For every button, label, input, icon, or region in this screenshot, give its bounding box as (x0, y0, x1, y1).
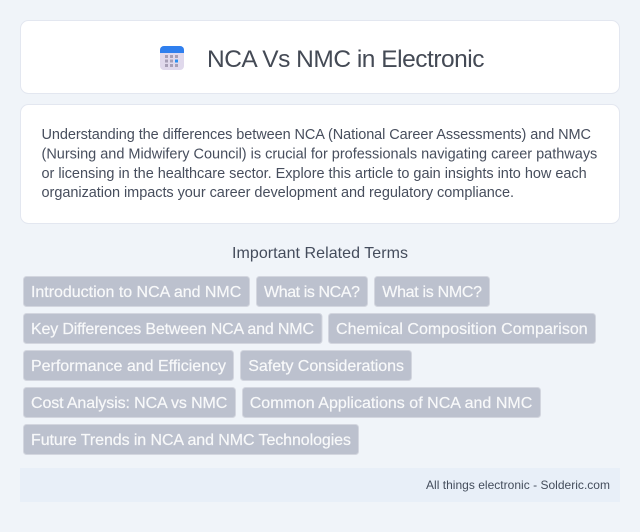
footer credit: All things electronic - Solderic.com (426, 478, 610, 492)
title: NCA Vs NMC in Electronic (207, 46, 484, 73)
description text: organization impacts your career development and regulatory compliance. (42, 185, 514, 201)
tag: Safety Considerations (248, 358, 404, 375)
tag: Future Trends in NCA and NMC Technologies (31, 432, 351, 449)
tag (24, 424, 358, 454)
heading: related terms: Important Related Terms (232, 245, 408, 262)
tag: What is NCA? (264, 284, 360, 301)
panel: description (20, 104, 620, 224)
description text: Understanding the differences between NCA (National Career Assessments) and NMC (42, 127, 591, 143)
tag (24, 350, 234, 380)
tag: Introduction to NCA and NMC (31, 284, 241, 301)
description text: or licensing in the healthcare sector. Explore this article to gain insights into how each (42, 166, 587, 182)
tag (374, 276, 490, 306)
tag (256, 276, 368, 306)
header card (20, 20, 620, 94)
tag: Common Applications of NCA and NMC (250, 395, 532, 412)
tag: What is NMC? (382, 284, 482, 301)
tag: Key Differences Between NCA and NMC (31, 321, 314, 338)
tag: Chemical Composition Comparison (336, 321, 588, 338)
description text: (Nursing and Midwifery Council) is crucial for professionals navigating career pathways (42, 146, 597, 162)
tag (24, 276, 250, 306)
tag (24, 314, 322, 344)
description text (42, 127, 597, 201)
icon: calendar (160, 46, 184, 70)
tag (242, 388, 540, 418)
tag: Cost Analysis: NCA vs NMC (31, 395, 227, 412)
tag (328, 314, 596, 344)
tag (24, 388, 236, 418)
footer (20, 468, 620, 502)
related terms tags (24, 276, 596, 454)
tag: Performance and Efficiency (31, 358, 226, 375)
tag (240, 350, 412, 380)
